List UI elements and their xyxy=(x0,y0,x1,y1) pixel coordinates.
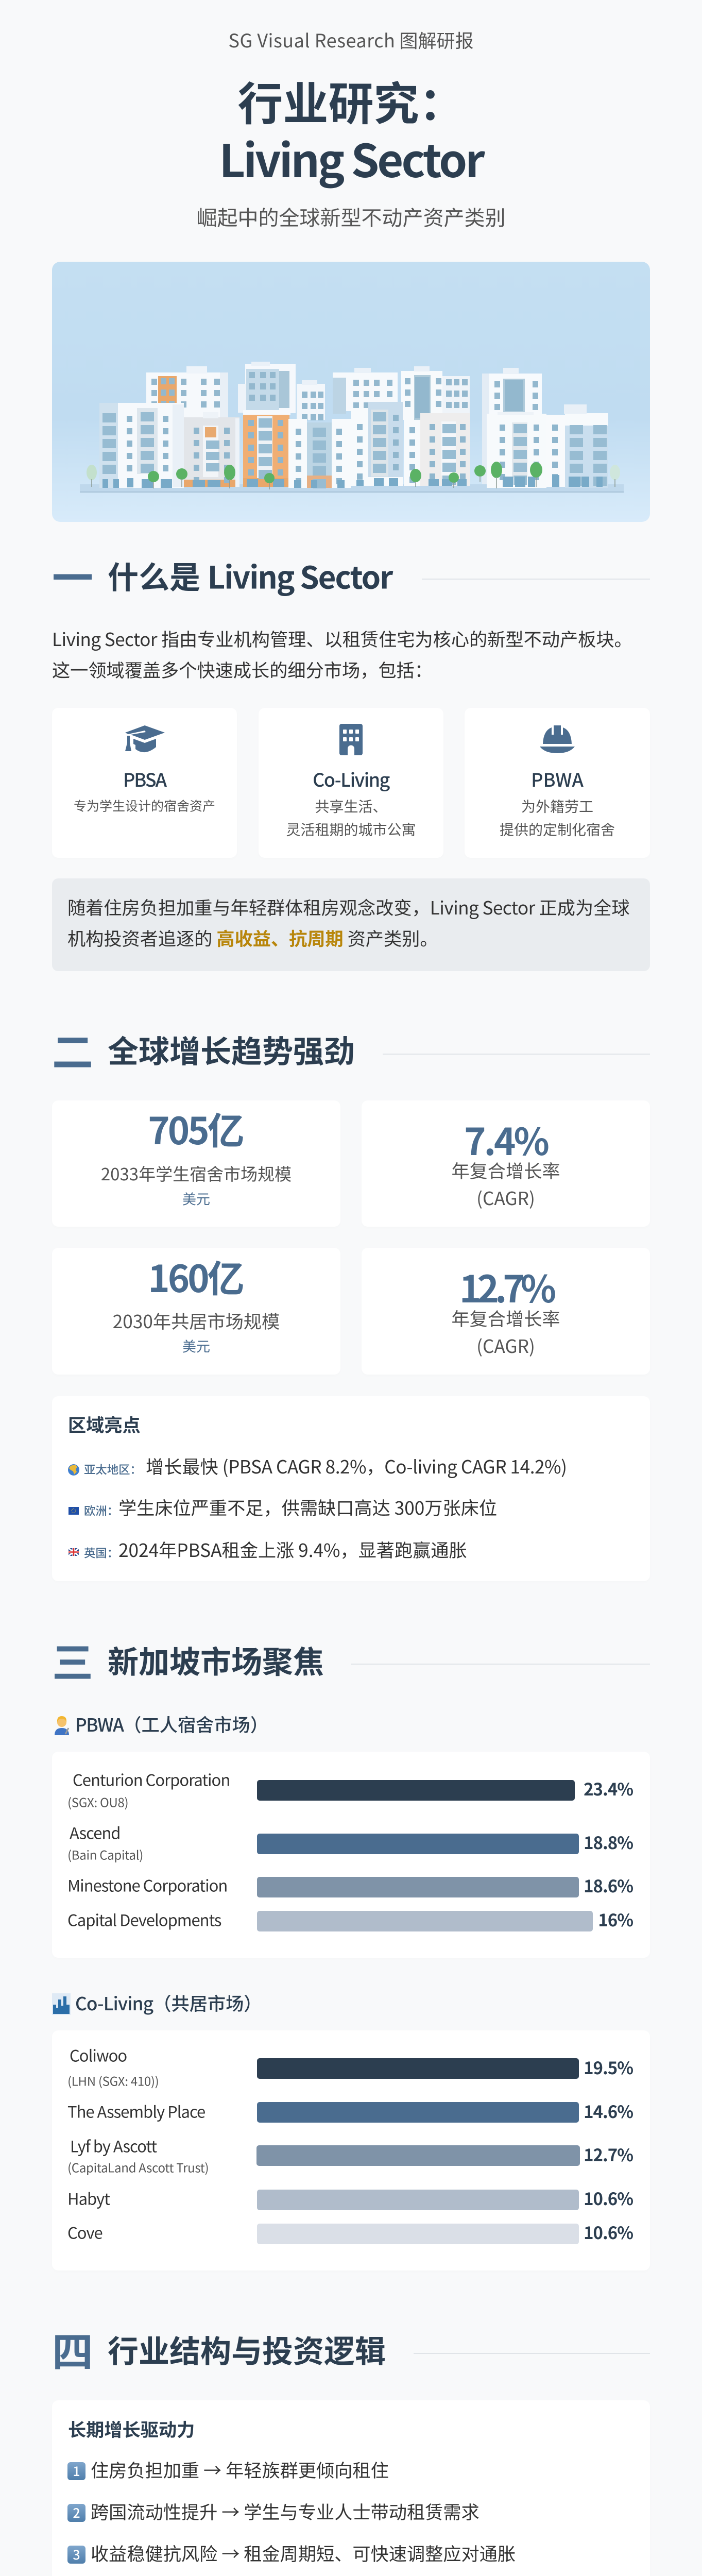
title: 行业研究： xyxy=(237,68,465,133)
bar row: Minestone: 18.6% xyxy=(584,1873,633,1897)
icon: hard hat xyxy=(540,725,575,753)
intro paragraph: Living Sector 指由专业机构管理、以租赁住宅为核心的新型不动产板块。 xyxy=(52,625,632,652)
callout: demand drivers: 随着住房负担加重与年轻群体租房观念改变，Living Sector 正成为全球机构投资者追逐的 高收益、抗周期 资产类别。 xyxy=(67,894,630,951)
card text xyxy=(286,795,416,839)
card title: PBSA xyxy=(123,766,166,792)
icon: graduation cap xyxy=(125,725,165,752)
label: APAC: 亚太地区： xyxy=(84,1461,142,1478)
driver 1: 住房负担加重 → 年轻族群更倾向租住 xyxy=(91,2456,389,2483)
bar row: The Assembly Place xyxy=(67,2098,633,2123)
section heading 3: 新加坡市场聚焦 xyxy=(108,1638,324,1683)
section heading 2: 全球增长趋势强劲 xyxy=(108,1027,355,1072)
front row xyxy=(99,402,608,488)
card text: 为外籍劳工 xyxy=(521,795,593,816)
bar chart: Co-Living operators xyxy=(52,2030,650,2270)
icon: worker emoji xyxy=(55,1716,69,1735)
stat card: 705亿: 美元 xyxy=(182,1188,210,1208)
bar row: Lyf by Ascott: (CapitaLand Ascott Trust) xyxy=(67,2158,209,2176)
bar row: The Assembly Place: 14.6% xyxy=(584,2098,633,2123)
badge 3: 3 xyxy=(73,2545,80,2564)
bar row: Minestone xyxy=(67,1873,633,1897)
subheading: PBWA market xyxy=(55,1711,268,1737)
bar row: The Assembly Place: The Assembly Place xyxy=(67,2099,205,2122)
card title: Co-Living xyxy=(313,766,389,792)
badge 1 xyxy=(67,2462,85,2480)
text: Europe: 学生床位严重不足，供需缺口高达 300万张床位 xyxy=(118,1494,497,1520)
badge 2: 2 xyxy=(73,2503,80,2522)
bar row: Coliwoo: 19.5% xyxy=(584,2055,633,2079)
bar row: Centurion: (SGX: OU8) xyxy=(67,1793,128,1811)
bar row: Ascend xyxy=(67,1820,633,1863)
icon: globe xyxy=(68,1464,79,1476)
stat card: 12.7%: 12.7% xyxy=(459,1259,552,1313)
callout: demand drivers xyxy=(52,878,650,971)
bar row: Capital Developments: 16% xyxy=(598,1907,633,1931)
stat card: 160亿 xyxy=(52,1248,340,1375)
bar row: Habyt xyxy=(67,2185,633,2210)
card text: 专为学生设计的宿舍资产 xyxy=(74,796,215,815)
stat card: 7.4%: 7.4% xyxy=(464,1112,547,1166)
section heading 1: 一 xyxy=(52,546,93,605)
stat card: 12.7% xyxy=(362,1248,650,1375)
panel heading: 区域亮点 xyxy=(68,1411,141,1437)
stat card: 7.4%: 年复合增长率 xyxy=(451,1157,560,1183)
card text: 共享生活、 xyxy=(315,795,387,816)
bar row: Capital Developments xyxy=(67,1907,633,1931)
bar row: Coliwoo: Coliwoo xyxy=(70,2043,127,2066)
bar row: Ascend: Ascend xyxy=(70,1820,121,1843)
text: UK: 2024年PBSA租金上涨 9.4%，显著跑赢通胀 xyxy=(118,1536,467,1563)
subheading: Co-Living market xyxy=(52,1990,262,2016)
section heading 3: 三 xyxy=(52,1630,93,1690)
bar row: Ascend: (Bain Capital) xyxy=(67,1845,143,1863)
section heading 1 xyxy=(52,546,650,605)
driver 3: 收益稳健抗风险 → 租金周期短、可快速调整应对通胀 xyxy=(91,2540,516,2566)
section heading 2 xyxy=(52,1020,650,1079)
card: Co-Living xyxy=(259,708,443,858)
bar row: Cove: 10.6% xyxy=(584,2219,633,2244)
stat card: 7.4% xyxy=(362,1100,650,1227)
bar row: Minestone: Minestone Corporation xyxy=(67,1873,227,1896)
bar row: Lyf by Ascott: 12.7% xyxy=(584,2142,633,2166)
intro paragraph: 这一领域覆盖多个快速成长的细分市场，包括： xyxy=(52,656,433,683)
bar row: Habyt: 10.6% xyxy=(584,2185,633,2210)
card title: PBWA xyxy=(531,766,584,792)
bar row: Lyf by Ascott xyxy=(67,2133,633,2176)
bar row: Lyf by Ascott: Lyf by Ascott xyxy=(70,2133,157,2157)
bar row: Coliwoo: (LHN (SGX: 410)) xyxy=(67,2072,159,2090)
section heading 2: 二 xyxy=(52,1020,93,1079)
stat card: 7.4%: (CAGR) xyxy=(476,1184,535,1211)
card: PBSA xyxy=(52,708,237,858)
subtitle: 崛起中的全球新型不动产资产类别 xyxy=(197,201,506,231)
panel: long-term drivers xyxy=(52,2400,650,2576)
section heading 4 xyxy=(52,2319,650,2379)
card text: 提供的定制化宿舍 xyxy=(500,819,615,839)
icon: UK flag xyxy=(69,1548,79,1556)
title: Living Sector xyxy=(219,125,483,191)
trees xyxy=(87,462,620,483)
stat card: 12.7%: (CAGR) xyxy=(476,1332,535,1359)
bar row: Centurion: 23.4% xyxy=(584,1776,633,1801)
bar chart: PBWA operators xyxy=(52,1752,650,1958)
bar row: Ascend: 18.8% xyxy=(584,1829,633,1854)
stat card: 705亿: 2033年学生宿舍市场规模 xyxy=(101,1161,292,1185)
bar row: Coliwoo xyxy=(67,2043,633,2090)
icon: cityscape emoji xyxy=(52,1993,71,2015)
bar row: Centurion: Centurion Corporation xyxy=(73,1767,230,1790)
bar row: Cove: Cove xyxy=(67,2220,102,2243)
back row xyxy=(146,362,542,487)
bar row: Habyt: Habyt xyxy=(67,2186,110,2209)
stat card: 705亿 xyxy=(52,1100,340,1227)
stat card: 705亿: 705亿 xyxy=(148,1101,245,1155)
card text xyxy=(500,795,615,839)
hero illustration: apartment buildings xyxy=(52,262,650,522)
stat card: 160亿: 2030年共居市场规模 xyxy=(113,1308,280,1334)
label: UK: 英国： xyxy=(84,1545,118,1561)
label: Europe: 欧洲： xyxy=(84,1502,118,1519)
badge 3 xyxy=(67,2546,85,2564)
section heading 4: 四 xyxy=(52,2319,93,2379)
card: PBWA xyxy=(465,708,650,858)
bar row: Capital Developments: Capital Developments xyxy=(67,1907,221,1930)
card text: 灵活租期的城市公寓 xyxy=(286,819,416,839)
panel heading: 长期增长驱动力 xyxy=(68,2416,195,2442)
subheading text: Co-Living（共居市场） xyxy=(75,1990,262,2016)
ground xyxy=(80,484,624,492)
section heading 1: 什么是 Living Sector xyxy=(108,553,392,598)
section heading 3 xyxy=(52,1630,650,1690)
panel: regional highlights xyxy=(52,1396,650,1581)
driver 2: 跨国流动性提升 → 学生与专业人士带动租赁需求 xyxy=(91,2498,480,2524)
icon: building xyxy=(339,724,363,755)
bar row: Centurion xyxy=(67,1767,633,1811)
kicker: SG Visual Research 图解研报 xyxy=(229,26,473,53)
bar row: Cove xyxy=(67,2219,633,2244)
title xyxy=(219,68,485,191)
text: APAC: 增长最快 (PBSA CAGR 8.2%，Co-living CAGR 14.2%) xyxy=(146,1453,567,1479)
badge 1: 1 xyxy=(73,2462,80,2480)
badge 2 xyxy=(67,2504,85,2522)
intro paragraph xyxy=(52,625,632,683)
stat card: 160亿: 160亿 xyxy=(148,1249,245,1303)
icon: EU flag xyxy=(69,1507,79,1515)
stat card: 12.7%: 年复合增长率 xyxy=(451,1305,560,1331)
stat card: 160亿: 美元 xyxy=(182,1335,210,1355)
section heading 4: 行业结构与投资逻辑 xyxy=(108,2327,386,2372)
subheading text: PBWA（工人宿舍市场） xyxy=(75,1711,268,1737)
